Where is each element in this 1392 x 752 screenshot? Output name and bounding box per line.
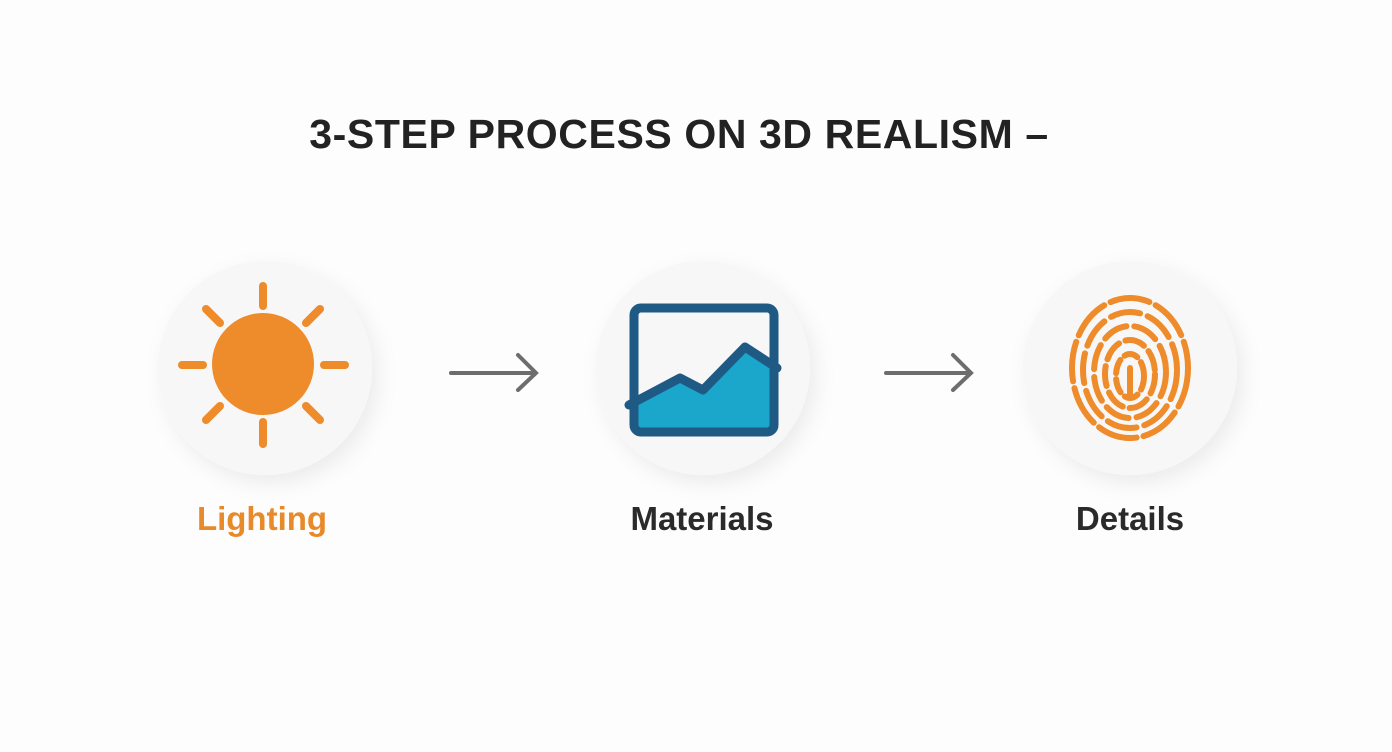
- label: materials: Materials: [630, 500, 774, 537]
- arrow 2: [886, 355, 971, 390]
- step 2: materials icon: [596, 261, 810, 475]
- label: lighting: Lighting: [197, 500, 327, 537]
- arrow 1: [451, 355, 536, 390]
- label: details: Details: [1076, 500, 1184, 537]
- step 1: lighting icon: [158, 261, 372, 475]
- step 3: details icon (fingerprint): [1023, 261, 1237, 475]
- title: 3-STEP PROCESS ON 3D REALISM –: [309, 111, 1049, 157]
